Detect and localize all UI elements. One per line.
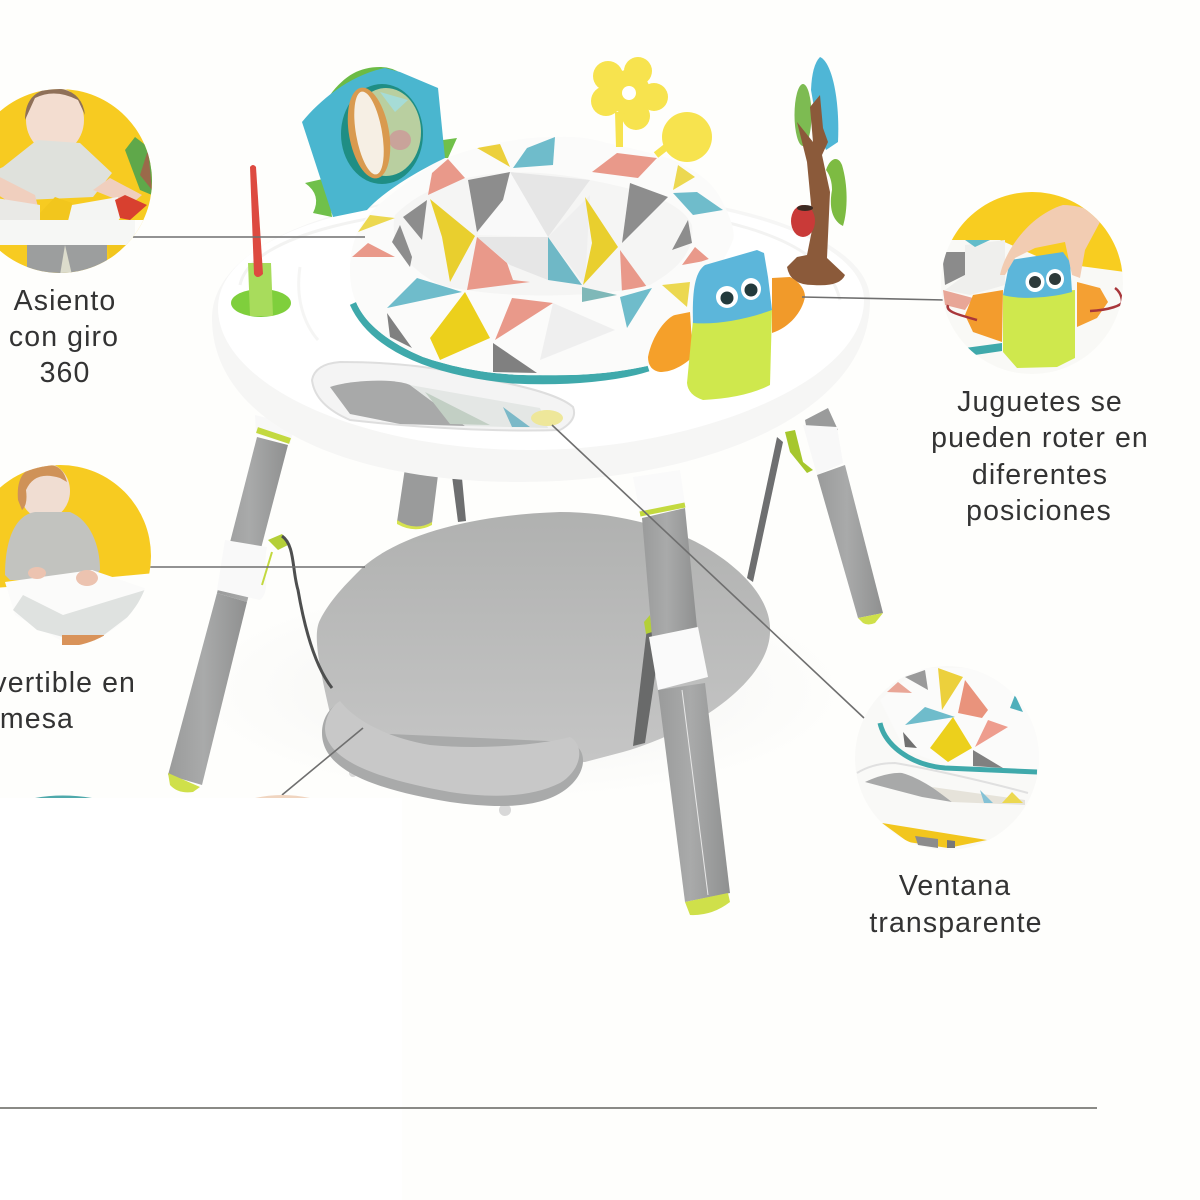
callout: table photo <box>0 465 151 645</box>
seat <box>350 137 723 384</box>
label: window: Ventana <box>899 870 1011 902</box>
white cover block <box>0 798 402 1200</box>
label: window <box>869 870 1043 939</box>
base plate <box>317 512 770 770</box>
back of seat triangles <box>477 144 510 167</box>
front left leg <box>168 415 332 792</box>
label: seat rotation: Asiento <box>14 285 116 317</box>
label: table: mesa <box>0 703 74 735</box>
label: seat rotation: 360 <box>40 357 90 389</box>
toy: peg <box>231 165 291 317</box>
label: seat rotation <box>9 285 119 389</box>
label: toy rotation <box>931 386 1149 527</box>
foot pad <box>322 701 583 816</box>
front right leg <box>633 470 730 915</box>
tray <box>212 190 870 482</box>
label: toy rotation: Juguetes se <box>957 386 1123 418</box>
label: table <box>0 667 136 735</box>
bottom rule <box>0 1107 1097 1109</box>
callout: seat rotation photo <box>0 89 152 273</box>
label: seat rotation: con giro <box>9 321 119 353</box>
toy: tree <box>787 57 847 285</box>
front cushion <box>356 259 710 375</box>
toy: flower <box>591 57 712 162</box>
label: toy rotation: posiciones <box>966 495 1112 527</box>
product: activity center <box>168 57 883 915</box>
leader lines <box>133 237 945 795</box>
toy: owl <box>648 250 805 400</box>
back legs <box>397 408 883 624</box>
label: toy rotation: diferentes <box>972 459 1108 491</box>
clear window <box>312 362 574 431</box>
label: toy rotation: pueden roter en <box>931 422 1149 454</box>
label: window: transparente <box>869 907 1043 939</box>
seat well <box>394 172 692 296</box>
callout: toy rotation photo <box>942 192 1122 368</box>
clipped circle remnants <box>35 795 310 798</box>
floor shadow <box>190 580 850 800</box>
toy: mirror panel <box>302 67 457 217</box>
callout: window photo <box>856 668 1038 848</box>
